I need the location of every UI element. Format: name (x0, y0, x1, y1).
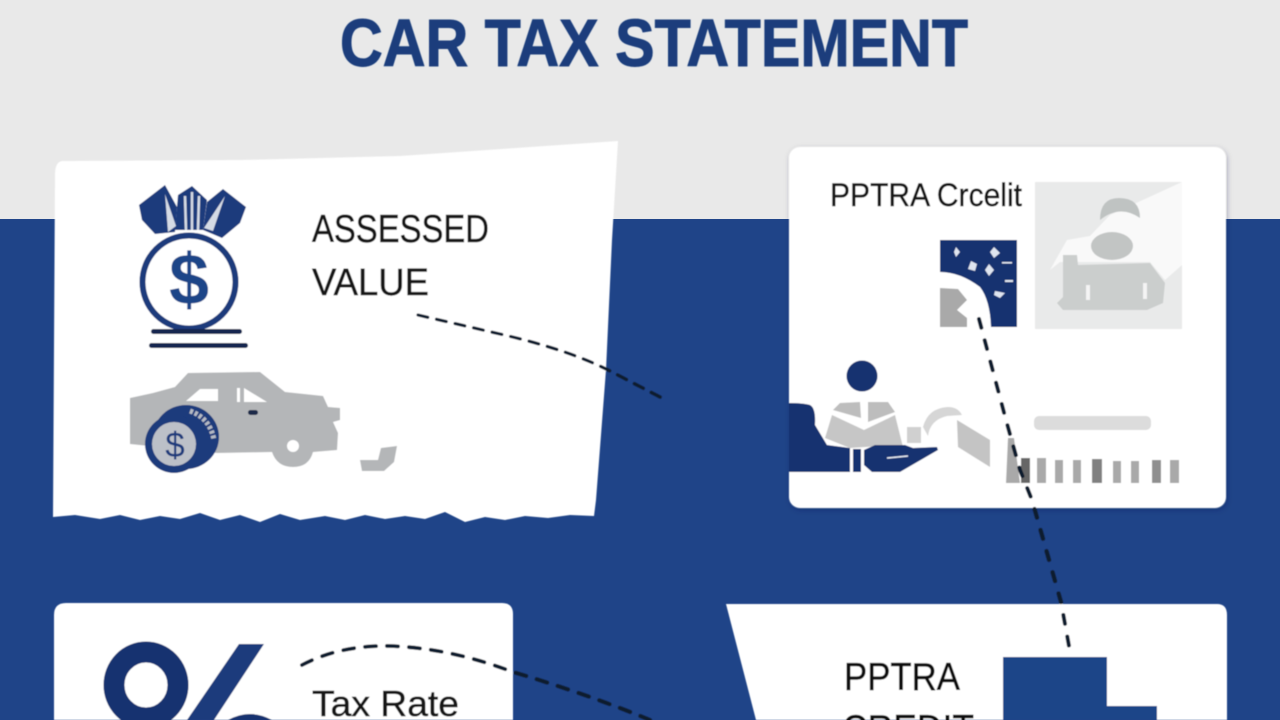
panel: assessed value (53, 141, 618, 522)
text: assessed value (312, 208, 489, 304)
icon: hand holding person (789, 360, 990, 472)
icon: grey car with coin (130, 372, 397, 473)
page background: upper band (0, 0, 1280, 219)
icon: money bag with dollar coin (139, 185, 248, 348)
text: PPTRA CREDIT: PPTRA (844, 656, 960, 699)
text: assessed value: ASSESSED (312, 208, 489, 251)
arrow: tax rate dashed connector (302, 646, 650, 720)
arrow: assessed value dashed connector (418, 315, 662, 398)
panel: tax rate (54, 603, 513, 720)
title: CAR TAX STATEMENT (340, 6, 968, 81)
panel shape: torn paper (53, 141, 618, 522)
heading: PPTRA Credit: PPTRA Crcelit (830, 177, 1022, 213)
icon: grey car with coin: $ (165, 426, 185, 465)
icon: money bag with dollar coin: $ (169, 240, 209, 320)
icon: blue stepped plus (1003, 657, 1157, 720)
page background: lower band (0, 219, 1280, 720)
image: faded person placeholder (1035, 182, 1182, 329)
arrow: credit dashed connector (979, 319, 1071, 657)
panel card (726, 604, 1227, 720)
panel card (789, 147, 1226, 508)
panel card (54, 603, 513, 720)
grey bar (1034, 416, 1151, 430)
panel: PPTRA credit bottom (726, 604, 1227, 720)
barcode strip (1006, 438, 1179, 483)
text: PPTRA CREDIT (842, 656, 974, 720)
icon: percent sign (114, 644, 272, 720)
icon: dark blue patterned square (940, 240, 1017, 327)
panel: PPTRA credit top (789, 147, 1226, 508)
text: assessed value: VALUE (312, 262, 429, 304)
